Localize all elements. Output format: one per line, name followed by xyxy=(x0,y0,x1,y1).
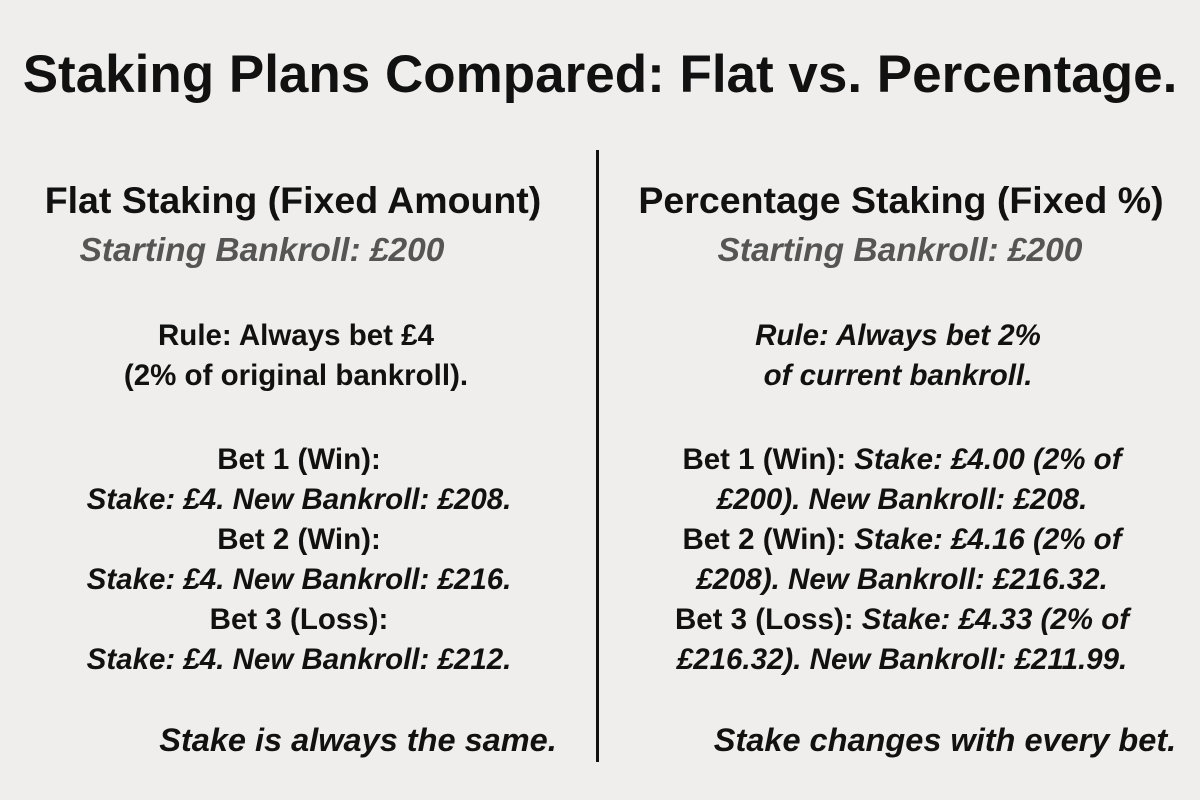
rule text: of current bankroll. xyxy=(764,359,1032,392)
rule text xyxy=(124,319,468,392)
bet sequence xyxy=(675,443,1132,676)
conclusion: Stake changes with every bet. xyxy=(714,722,1176,758)
rule text: Rule: Always bet £4 xyxy=(158,319,434,352)
divider line xyxy=(596,150,599,762)
subtitle: starting bankroll: Starting Bankroll: £200 xyxy=(80,232,444,269)
heading: flat staking: Flat Staking (Fixed Amount) xyxy=(45,179,541,221)
bet sequence: Bet 3 (Loss): Stake: £4.33 (2% of xyxy=(675,603,1129,636)
bet sequence: Bet 1 (Win): Stake: £4.00 (2% of xyxy=(682,443,1122,476)
bet sequence: £208). New Bankroll: £216.32. xyxy=(696,563,1108,596)
bet sequence: £216.32). New Bankroll: £211.99. xyxy=(677,643,1127,676)
title: Staking Plans Compared: Flat vs. Percentage. xyxy=(23,45,1177,104)
bet sequence: Bet 2 (Win): xyxy=(217,523,381,556)
rule text: (2% of original bankroll). xyxy=(124,359,468,392)
bet sequence: Stake: £4. New Bankroll: £208. xyxy=(87,483,511,516)
bet sequence: Bet 3 (Loss): xyxy=(210,603,388,636)
bet sequence xyxy=(87,443,511,676)
subtitle: starting bankroll: Starting Bankroll: £200 xyxy=(718,232,1082,269)
panel: flat staking xyxy=(45,179,557,758)
heading: percentage staking: Percentage Staking (Fixed %) xyxy=(638,179,1164,221)
bet sequence: Bet 1 (Win): xyxy=(217,443,381,476)
bet sequence: Bet 2 (Win): Stake: £4.16 (2% of xyxy=(682,523,1122,556)
bet sequence: Stake: £4. New Bankroll: £216. xyxy=(87,563,511,596)
rule text xyxy=(755,319,1041,392)
bet sequence: Stake: £4. New Bankroll: £212. xyxy=(87,643,511,676)
panel: percentage staking xyxy=(638,179,1176,758)
rule text: Rule: Always bet 2% xyxy=(755,319,1041,352)
conclusion: Stake is always the same. xyxy=(159,722,557,758)
bet sequence: £200). New Bankroll: £208. xyxy=(717,483,1087,516)
